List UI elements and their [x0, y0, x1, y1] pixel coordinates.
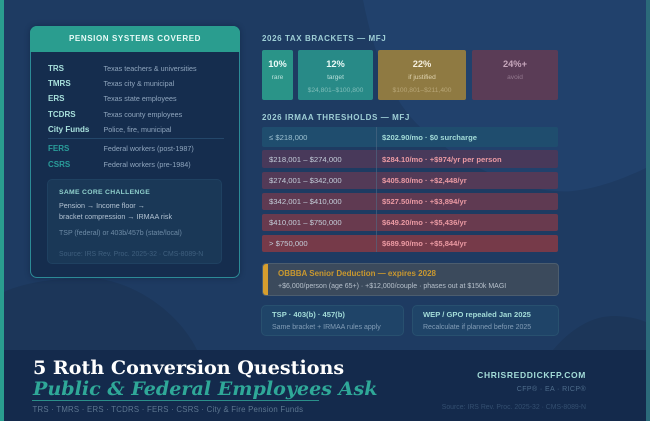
website: CHRISREDDICKFP.COM [477, 370, 586, 380]
premium: $405.80/mo · +$2,448/yr [382, 176, 467, 185]
income: $274,001 – $342,000 [269, 176, 342, 185]
description: ERS: Texas state employees [104, 94, 177, 103]
income: $410,001 – $750,000 [269, 218, 342, 227]
accent bar [262, 263, 268, 296]
card: TSP 403(b) 457(b) [261, 305, 404, 336]
label: target [327, 74, 344, 81]
source: Source: IRS Rev. Proc. 2025-32 · CMS-8089-N [442, 404, 586, 411]
card text: Recalculate if planned before 2025 [423, 324, 531, 331]
premium: $527.50/mo · +$3,894/yr [382, 197, 467, 206]
income: $218,001 – $274,000 [269, 155, 342, 164]
range: $100,801–$211,400 [392, 87, 452, 94]
card text: Same bracket + IRMAA rules apply [272, 324, 381, 331]
description: TRS: Texas teachers & universities [104, 64, 197, 73]
callout: same core challenge [47, 179, 222, 264]
rate: 12% [326, 59, 345, 69]
systems line: TRS · TMRS · ERS · TCDRS · FERS · CSRS · City & Fire Pension Funds [32, 405, 303, 414]
label: avoid [507, 74, 523, 81]
premium: $649.20/mo · +$5,436/yr [382, 218, 467, 227]
income: $342,001 – $410,000 [269, 197, 342, 206]
system: TCDRS: TCDRS [48, 110, 76, 119]
IRMAA table [262, 127, 558, 252]
income: ≤ $218,000 [269, 133, 307, 142]
system: CSRS: CSRS [48, 160, 70, 169]
credentials: CFP® · EA · RICP® [517, 386, 586, 393]
income: > $750,000 [269, 239, 308, 248]
premium: $284.10/mo · +$974/yr per person [382, 155, 502, 164]
callout source: Source: IRS Rev. Proc. 2025-32 · CMS-8089-N [59, 251, 203, 258]
callout text: +$6,000/person (age 65+) · +$12,000/couple · phases out at $150k MAGI [278, 283, 506, 290]
callout text: bracket compression → IRMAA risk [59, 212, 172, 221]
system: ERS: ERS [48, 94, 64, 103]
description: TMRS: Texas city & municipal [104, 79, 174, 88]
row 6 [262, 235, 558, 252]
rate: 10% [268, 59, 287, 69]
system: City Funds: City Funds [48, 125, 89, 134]
rate: 24%+ [503, 59, 527, 69]
title: 5 Roth Conversion Questions [33, 356, 344, 379]
callout heading: SAME CORE CHALLENGE [59, 189, 150, 196]
card: WEP GPO repealed [412, 305, 559, 336]
bracket: 12% [298, 50, 373, 100]
bracket: 22% [378, 50, 466, 100]
row 1 [262, 127, 558, 147]
row 2 [262, 150, 558, 168]
callout text: Pension → Income floor → [59, 200, 145, 210]
range: $24,801–$100,800 [308, 87, 363, 94]
callout text [59, 200, 172, 221]
card title: WEP / GPO repealed Jan 2025 [423, 310, 531, 319]
panel heading [30, 26, 240, 52]
description: FERS: Federal workers (post-1987) [104, 144, 194, 153]
premium: $202.90/mo · $0 surcharge [382, 133, 477, 142]
card title: TSP · 403(b) · 457(b) [272, 310, 345, 319]
panel: pension systems covered [30, 26, 240, 278]
row 3 [262, 172, 558, 189]
system: TMRS: TMRS [48, 79, 71, 88]
description: CSRS: Federal workers (pre-1984) [104, 160, 191, 169]
bracket: 10% [262, 50, 293, 100]
callout title: OBBBA Senior Deduction — expires 2028 [278, 269, 436, 278]
callout: OBBBA senior deduction [262, 263, 559, 296]
label: if justified [408, 74, 436, 81]
callout note: TSP (federal) or 403b/457b (state/local) [59, 230, 182, 237]
rate: 22% [413, 59, 431, 69]
subtitle: Public & Federal Employees Ask [33, 377, 377, 400]
description: City Funds: Police, fire, municipal [104, 125, 171, 134]
footer band [4, 350, 646, 421]
system: FERS: FERS [48, 144, 69, 153]
premium: $689.90/mo · +$5,844/yr [382, 239, 467, 248]
row 5 [262, 214, 558, 231]
bracket: 24%+ [472, 50, 558, 100]
label: rare [272, 74, 283, 81]
description: TCDRS: Texas county employees [104, 110, 182, 119]
underline rule [32, 400, 319, 401]
system: TRS: TRS [48, 64, 64, 73]
heading: IRMAA thresholds: 2026 IRMAA THRESHOLDS — MFJ [262, 113, 410, 122]
row 4 [262, 193, 558, 210]
heading: tax brackets: 2026 TAX BRACKETS — MFJ [262, 34, 386, 43]
panel heading: PENSION SYSTEMS COVERED [69, 34, 201, 43]
